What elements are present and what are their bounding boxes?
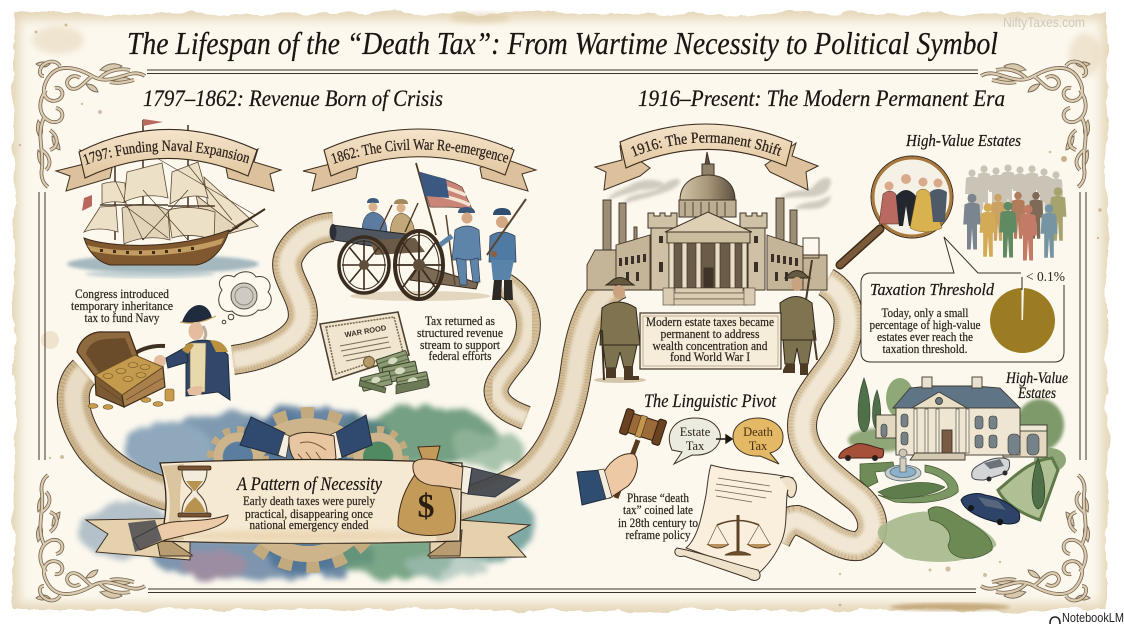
icon: civil war cannon and soldiers	[330, 163, 526, 301]
ribbon banner: 1862	[302, 128, 538, 192]
timeline ribbon: centre sweep	[455, 283, 620, 506]
timeline ribbon: right sweep	[776, 282, 872, 546]
section heading: 1797-1862: 1797–1862: Revenue Born of Crisis	[143, 86, 443, 111]
frame lines	[39, 70, 1086, 592]
banner text: 1862: The Civil War Re-emergence	[331, 138, 508, 164]
text: tax returned	[417, 314, 503, 363]
callout value: < 0.1%	[1026, 270, 1065, 285]
text: tax returned: Tax returned as	[425, 314, 495, 328]
ribbon banner: 1916	[594, 124, 820, 191]
corner ornament: top left	[36, 62, 145, 187]
heading: high-value estates second	[1005, 370, 1068, 402]
house	[876, 377, 1047, 460]
text: congress introduced: Congress introduced	[75, 287, 170, 301]
banner text: 1916: The Permanent Shift	[631, 132, 782, 157]
panel: modern estate taxes: wealth concentration and	[652, 339, 768, 353]
pie chart	[990, 277, 1055, 353]
hedge: right bed ring	[878, 465, 958, 503]
callout body: estates ever reach the	[877, 330, 973, 344]
panel: modern estate taxes: permanent to address	[660, 327, 760, 341]
icon: sailing ship	[67, 119, 265, 278]
gears	[211, 414, 405, 566]
banner body: national emergency ended	[250, 518, 369, 532]
callout body: Today, only a small	[882, 306, 969, 320]
banner text: 1797: Funding Naval Expansion	[83, 140, 249, 165]
text: tax returned: structured revenue	[417, 326, 503, 340]
text: phrase death tax: tax” coined late	[623, 503, 693, 517]
water	[67, 255, 259, 278]
banner body: practical, disappearing once	[245, 507, 373, 521]
dome	[679, 152, 736, 217]
panel: pattern of necessity banner	[86, 460, 530, 560]
panel: modern estate taxes: fond World War I	[670, 350, 750, 364]
towers	[648, 213, 767, 290]
icon: stacks of money	[359, 350, 430, 394]
icon: hourglass in hand	[128, 466, 228, 552]
text: phrase death tax: in 28th century to	[618, 516, 698, 530]
icon: treasure chest with coins	[77, 332, 174, 409]
icon: money bag with hand: $	[418, 488, 434, 525]
icon: WWI soldier left	[594, 278, 646, 383]
icon: estate tax speech bubble: Estate	[680, 425, 711, 439]
icon: crowd of people	[963, 164, 1066, 260]
flag	[416, 163, 473, 235]
text: phrase death tax: reframe policy	[626, 528, 691, 542]
fountain	[885, 449, 921, 481]
icon: estate tax speech bubble: Tax	[686, 439, 705, 453]
text: tax returned: federal efforts	[428, 349, 492, 363]
title: The Lifespan of the “Death Tax”: From Wartime Necessity to Political Symbol	[127, 25, 998, 61]
illustration: mansion estate	[839, 377, 1066, 562]
panel: modern estate taxes	[640, 313, 781, 369]
right gear	[351, 430, 405, 484]
text: phrase death tax	[618, 491, 698, 542]
icon: gavel in hand	[577, 408, 667, 505]
steps	[663, 288, 755, 305]
car: white	[972, 458, 1010, 482]
banner body: Early death taxes were purely	[243, 494, 376, 508]
section heading: 1916-present: 1916–Present: The Modern Permanent Era	[638, 86, 1005, 111]
icon: war bond certificate: WAR ROOD	[344, 323, 388, 339]
icon: capitol and factories	[587, 152, 831, 305]
timeline ribbon: left sweep	[73, 227, 333, 495]
text: phrase death tax: Phrase “death	[627, 491, 690, 505]
text: congress introduced	[71, 287, 173, 325]
wings	[587, 235, 827, 290]
ribbon banner: 1797	[54, 128, 282, 192]
standing soldiers	[440, 199, 526, 300]
corner ornament: top right	[981, 62, 1090, 187]
wealthy figures	[879, 174, 947, 232]
small soldiers	[362, 198, 418, 234]
text: tax returned: stream to support	[420, 338, 500, 352]
panel: taxation threshold callout	[861, 237, 1065, 362]
icon: naval officer	[154, 305, 230, 400]
chimneys	[603, 198, 797, 250]
icon: thought bubble with coin	[219, 272, 271, 324]
icon: estate tax speech bubble	[669, 418, 720, 464]
lawns and hedges	[848, 378, 1066, 562]
hedge: centre bed	[878, 483, 945, 498]
callout body: percentage of high-value	[870, 318, 981, 332]
hedge: right enclosure	[998, 458, 1058, 520]
arrow: estate tax to death tax	[716, 435, 732, 443]
heading: high-value estates second: Estates	[1017, 385, 1056, 402]
icon: magnifying glass	[840, 156, 953, 265]
panel: modern estate taxes: Modern estate taxes became	[646, 315, 774, 329]
banner heading: A Pattern of Necessity	[235, 474, 382, 495]
icon: war bond certificate	[320, 312, 409, 380]
smoke	[607, 178, 831, 210]
heading: the linguistic pivot: The Linguistic Pivot	[644, 391, 777, 412]
callout heading: Taxation Threshold	[870, 280, 994, 299]
icon: death tax speech bubble: Death	[743, 425, 774, 439]
banner tails	[86, 518, 530, 560]
heading: high-value estates second: High-Value	[1005, 370, 1068, 387]
car: red	[839, 444, 884, 461]
icon: scroll with scales	[675, 465, 796, 580]
banner body	[243, 494, 376, 532]
icon: death tax speech bubble	[733, 418, 783, 464]
heading: high-value estates: High-Value Estates	[905, 131, 1021, 150]
cannon	[330, 224, 490, 301]
portico	[665, 212, 752, 288]
watercolor wash behind necessity banner	[77, 405, 535, 581]
icon: handshake	[240, 415, 372, 469]
watermark: NiftyTaxes.com: NiftyTaxes.com	[1003, 14, 1085, 30]
text: congress introduced: temporary inheritance	[71, 299, 173, 313]
left gear	[211, 430, 265, 484]
car: blue	[961, 494, 1020, 525]
corner ornament: bottom left	[36, 475, 145, 600]
big gear	[232, 414, 384, 566]
hedge: left bed	[860, 462, 895, 487]
cypress trees	[858, 378, 881, 432]
icon: WWI soldier right	[780, 260, 817, 375]
icon: death tax speech bubble: Tax	[749, 439, 768, 453]
corner ornament: bottom right	[981, 475, 1090, 600]
callout body	[870, 306, 981, 356]
callout body: taxation threshold.	[882, 342, 968, 356]
icon: money bag with hand	[398, 446, 520, 535]
text: congress introduced: tax to fund Navy	[84, 311, 160, 325]
